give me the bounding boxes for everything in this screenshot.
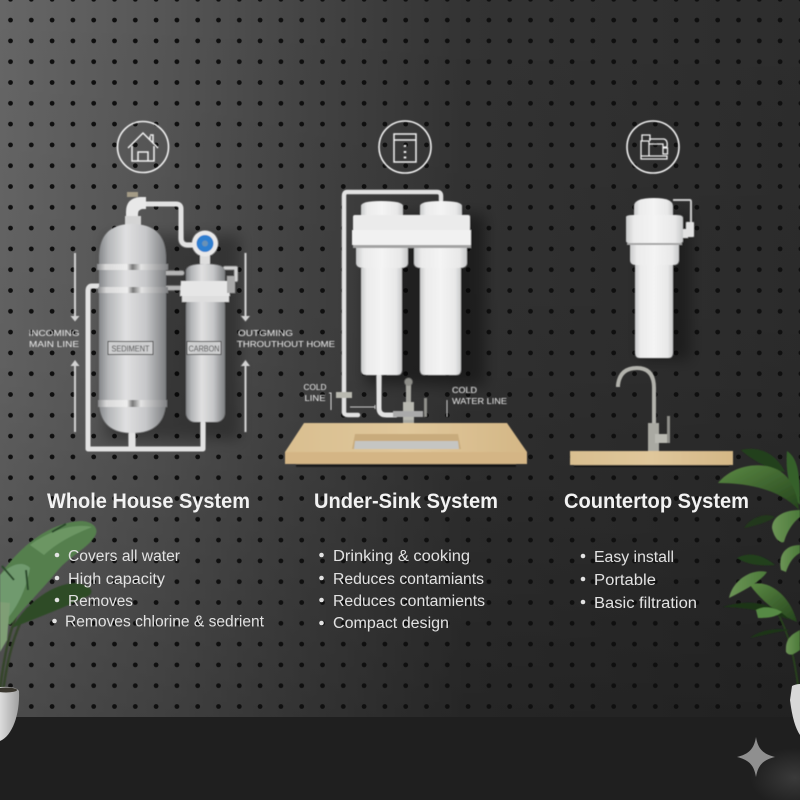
list: whole house features <box>52 548 265 630</box>
list: countertop features: Easy install <box>594 549 674 566</box>
faucet <box>393 378 427 431</box>
list: whole house features: Covers all water <box>68 548 180 565</box>
icon: faucet <box>627 121 679 173</box>
gooseneck faucet <box>618 368 670 453</box>
list: whole house features: Removes <box>68 593 133 610</box>
single filter housing <box>626 198 694 358</box>
shut-off valve and connector <box>336 392 375 409</box>
twin filter housings <box>352 201 471 375</box>
list: under-sink features: Compact design <box>333 615 449 632</box>
heading: under-sink system: Under-Sink System <box>314 490 498 513</box>
under-sink plumbing <box>344 192 441 415</box>
list: countertop features: Basic filtration <box>594 595 697 612</box>
arrows: outgoing <box>241 253 250 432</box>
list: under-sink features: Reduces contamiants <box>333 571 484 588</box>
dark floor <box>0 717 800 800</box>
cold line labels: COLD <box>304 383 327 392</box>
cold line labels: LINE <box>304 394 326 403</box>
wall shadow for filters <box>365 215 485 385</box>
pot: left <box>0 687 19 741</box>
plant: left <box>0 521 96 692</box>
panel: whole house system <box>28 122 335 449</box>
heading: whole house system: Whole House System <box>47 490 250 513</box>
panel: under-sink system <box>285 121 527 467</box>
carbon filter <box>180 264 235 422</box>
whole house plumbing <box>88 204 236 449</box>
label: incoming main line: INCOMING <box>28 328 80 338</box>
label: outgoing throughout home: THROUTHOUT HOME <box>237 339 335 349</box>
cold line labels <box>304 383 507 417</box>
carbon filter: CARBON <box>188 344 220 354</box>
label: outgoing throughout home <box>237 328 335 349</box>
cold line labels: COLD <box>452 385 477 395</box>
cold line labels: WATER LINE <box>452 396 507 406</box>
list: countertop features <box>581 549 697 612</box>
icon: under-sink cabinet <box>379 121 431 173</box>
list: under-sink features: Drinking & cooking <box>333 548 470 565</box>
label: outgoing throughout home: OUTGMING <box>238 328 293 338</box>
wall shadow for tanks <box>105 235 240 440</box>
plant: right <box>718 449 800 700</box>
pressure gauge <box>192 230 218 264</box>
elbow valve <box>125 192 146 225</box>
heading: countertop system: Countertop System <box>564 490 749 513</box>
arrows: incoming <box>70 253 80 432</box>
label: incoming main line <box>28 328 80 349</box>
list: under-sink features: Reduces contamients <box>333 593 485 610</box>
wooden shelf <box>570 451 733 467</box>
icon: house <box>118 122 168 172</box>
label: incoming main line: MAIN LINE <box>29 339 79 349</box>
panel: countertop system <box>570 121 733 467</box>
wooden counter with sink <box>285 423 527 467</box>
sediment tank <box>97 224 168 433</box>
list: whole house features: High capacity <box>68 571 165 588</box>
sediment tank: SEDIMENT <box>112 344 150 354</box>
icon: sparkle watermark <box>737 737 775 777</box>
list: whole house features: Removes chlorine & sedrient <box>65 614 265 630</box>
list: under-sink features <box>319 548 485 632</box>
wall shadow for filter <box>640 215 690 360</box>
pot: right <box>790 684 800 735</box>
list: countertop features: Portable <box>594 572 656 589</box>
